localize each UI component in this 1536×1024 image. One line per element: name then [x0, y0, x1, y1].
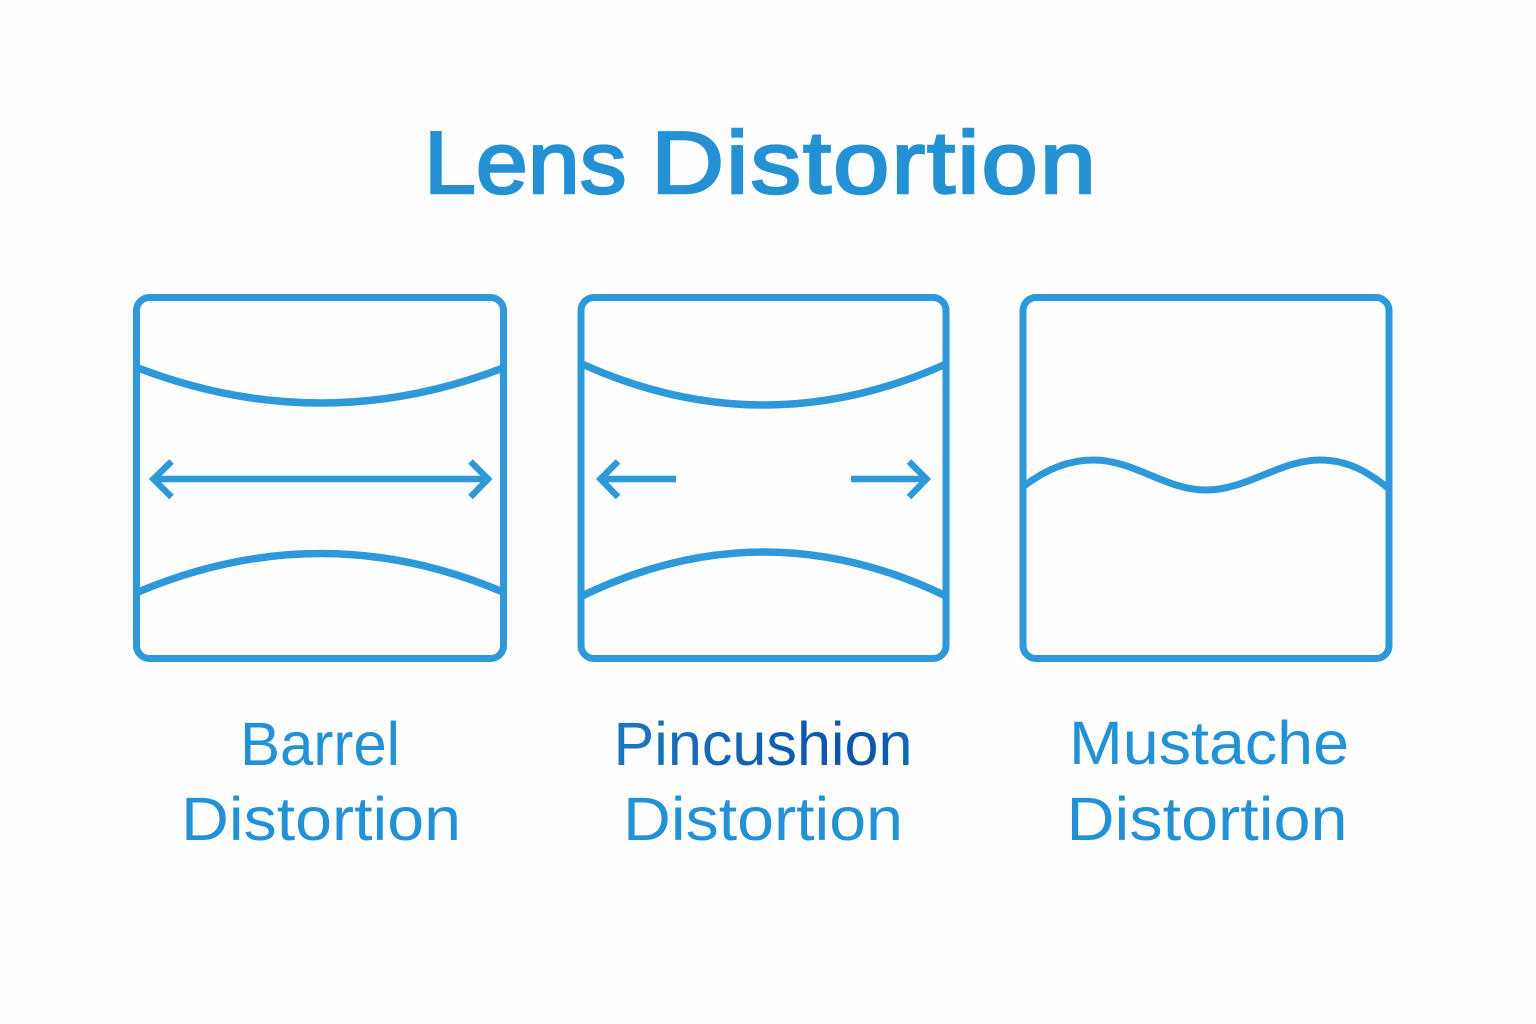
bottom curve	[582, 552, 946, 596]
label: mustache: Mustache	[1069, 709, 1349, 777]
bottom curve	[138, 554, 503, 592]
label: mustache: Distortion	[1066, 785, 1348, 853]
title	[424, 114, 1096, 212]
label: mustache	[1066, 709, 1349, 853]
title: Distortion	[651, 114, 1096, 212]
title: Lens	[424, 114, 626, 212]
label: barrel: Distortion	[181, 785, 461, 853]
label: barrel: Barrel	[240, 710, 400, 778]
label: pincushion	[614, 710, 912, 853]
top curve	[582, 364, 946, 405]
panel: pincushion distortion	[581, 298, 946, 658]
double arrow	[153, 462, 488, 497]
right arrow	[851, 462, 926, 497]
wave	[1024, 460, 1388, 490]
left arrow	[600, 462, 676, 497]
label: pincushion: Pincushion	[614, 710, 912, 778]
panel: mustache distortion	[1023, 298, 1389, 658]
panel: barrel distortion	[136, 298, 504, 658]
label: pincushion: Distortion	[623, 785, 903, 853]
top curve	[138, 368, 503, 403]
label: barrel	[181, 710, 461, 853]
